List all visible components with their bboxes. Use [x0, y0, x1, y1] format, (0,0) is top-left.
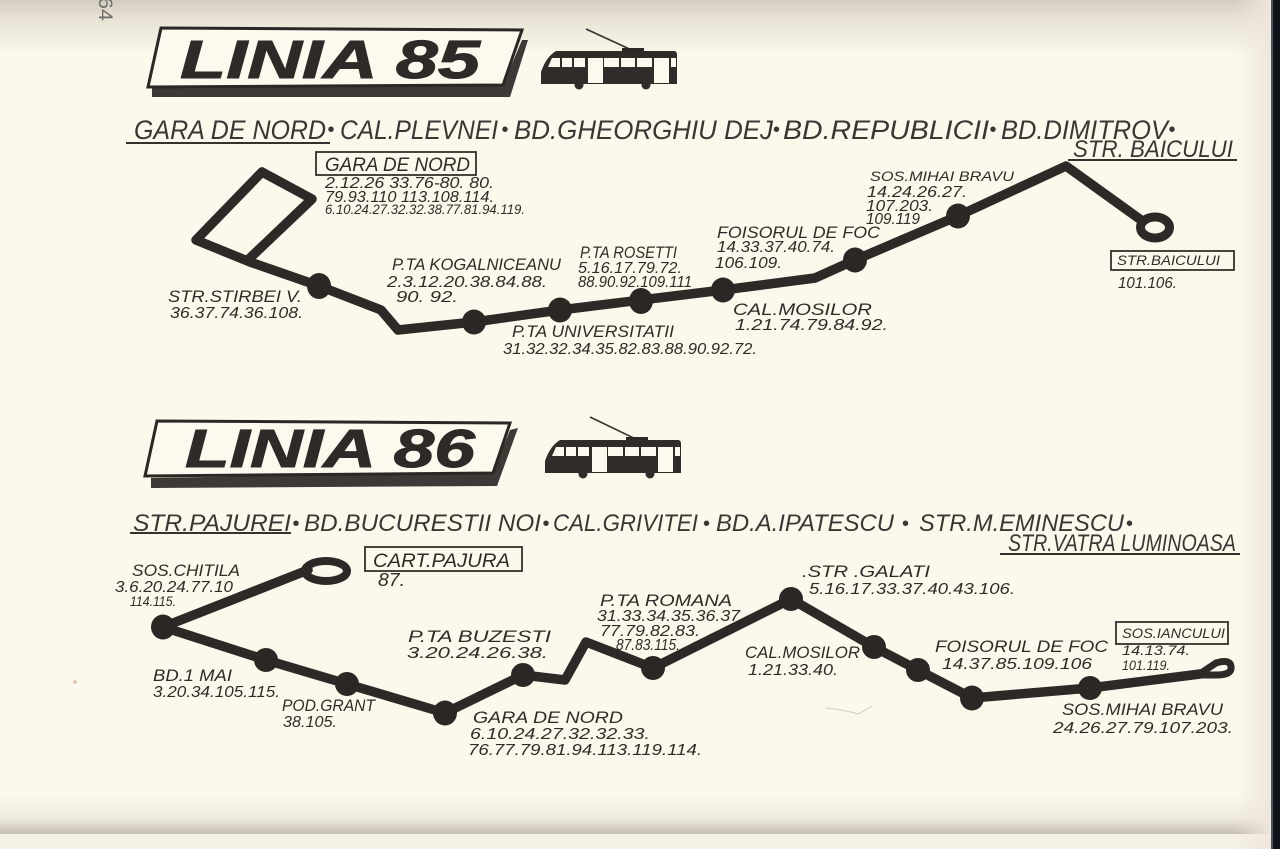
- stop: Foisorul de Foc: [715, 223, 881, 272]
- stop: Sos. Mihai Bravu: SOS.MIHAI BRAVU: [870, 169, 1014, 184]
- stop: Foisorul de Foc: [935, 637, 1109, 673]
- stop: P-ta Romana: [597, 591, 745, 654]
- stop: Bd. 1 Mai: 3.20.34.105.115.: [153, 684, 280, 701]
- stop: Str. Baicului: STR.BAICULUI: [1117, 253, 1220, 268]
- route heading line 86: [130, 510, 1240, 557]
- stop: Pod. Grant: [282, 696, 376, 731]
- stop: P-ta Rosetti: [578, 243, 692, 291]
- stop: Sos. Mihai Bravu: 24.26.27.79.107.203.: [1052, 720, 1233, 737]
- stop: P-ta Kogalniceanu: P.TA KOGALNICEANU: [392, 255, 562, 274]
- stop: Foisorul de Foc: FOISORUL DE FOC: [935, 637, 1109, 656]
- stop: Bd. 1 Mai: BD.1 MAI: [153, 666, 232, 685]
- stop: Sos. Iancului: 101.119.: [1122, 658, 1170, 673]
- route diagram line 85: [196, 166, 1170, 334]
- route heading line 86: CAL.GRIVITEI: [553, 510, 698, 537]
- stop: Sos. Mihai Bravu: 107.203.: [866, 198, 933, 215]
- route heading line 85: •: [328, 119, 335, 141]
- stop: P-ta Universitatii: P.TA UNIVERSITATII: [512, 322, 674, 341]
- route heading line 85: BD.REPUBLICII: [783, 115, 990, 145]
- title plate: Linia 86: LINIA 86: [185, 419, 476, 479]
- route heading line 85: BD.DIMITROV: [1001, 115, 1171, 145]
- stop: Gara de Nord: GARA DE NORD: [325, 155, 470, 176]
- stop: Str. Stirbei V.: STR.STIRBEI V.: [168, 287, 302, 306]
- route heading line 86: •: [1126, 513, 1133, 535]
- route heading line 86: BD.A.IPATESCU: [716, 510, 895, 537]
- route heading line 85: CAL.PLEVNEI: [340, 115, 498, 145]
- route heading line 86: •: [703, 513, 710, 535]
- route heading line 85: GARA DE NORD: [134, 115, 326, 145]
- route heading line 86: •: [542, 513, 550, 535]
- route heading line 86: STR.M.EMINESCU: [919, 510, 1125, 537]
- stop: Sos. Mihai Bravu: [1052, 700, 1233, 737]
- stop: Sos. Iancului: SOS.IANCULUI: [1122, 626, 1225, 641]
- stop: P-ta Rosetti: P.TA ROSETTI: [580, 243, 677, 262]
- stop: Foisorul de Foc: 106.109.: [715, 255, 782, 272]
- stop: Sos. Mihai Bravu: [866, 169, 1014, 228]
- stop: Sos. Iancului: 14.13.74.: [1122, 643, 1190, 658]
- stop: Gara de Nord: GARA DE NORD: [473, 708, 623, 727]
- stop: Sos. Chitila: 114.115.: [130, 594, 176, 609]
- stop: Pod. Grant: POD.GRANT: [282, 696, 376, 715]
- stop: Gara de Nord: [468, 708, 702, 759]
- stop: Sos. Chitila: [115, 561, 240, 609]
- stop: Cart. Pajura: CART.PAJURA: [373, 551, 510, 572]
- stop: Foisorul de Foc: FOISORUL DE FOC: [717, 223, 881, 242]
- stop: P-ta Rosetti: 88.90.92.109.111: [578, 274, 692, 291]
- stop: Gara de Nord: 2.12.26 33.76-80. 80.: [324, 175, 494, 192]
- stop: P-ta Romana: 31.33.34.35.36.37.: [597, 608, 745, 625]
- stop: Foisorul de Foc: 14.37.85.109.106: [942, 656, 1092, 673]
- icon: trolleybus line 86: [545, 417, 681, 478]
- stop: Cart. Pajura: 87.: [378, 570, 405, 590]
- route heading line 86: STR.VATRA LUMINOASA: [1008, 530, 1236, 557]
- stop: Gara de Nord: 6.10.24.27.32.32.33.: [470, 726, 650, 743]
- stop: Sos. Chitila: SOS.CHITILA: [132, 561, 240, 580]
- stop: Gara de Nord: 76.77.79.81.94.113.119.114.: [468, 742, 702, 759]
- stop: Sos. Chitila: 3.6.20.24.77.10: [115, 579, 233, 596]
- stop: P-ta Kogalniceanu: [386, 255, 562, 306]
- stop: Str. Galati: 5.16.17.33.37.40.43.106.: [809, 581, 1015, 598]
- stop: P-ta Romana: 87.83.115.: [616, 637, 680, 654]
- stop: Cal. Mosilor: [733, 300, 888, 334]
- stop: P-ta Universitatii: [503, 322, 757, 358]
- stop: Str. Galati: [802, 562, 1015, 598]
- route heading line 86: •: [902, 513, 909, 535]
- stop: Gara de Nord: 6.10.24.27.32.32.38.77.81.94.119.: [325, 202, 525, 217]
- route diagram line 86: [151, 561, 1231, 726]
- route heading line 86: •: [292, 513, 300, 535]
- stop: Str. Baicului: [1111, 251, 1234, 292]
- stop: Str. Baicului: 101.106.: [1118, 275, 1177, 292]
- stop: Str. Stirbei V.: [168, 287, 303, 322]
- stop: P-ta Universitatii: 31.32.32.34.35.82.83.88.90.92.72.: [503, 341, 757, 358]
- stop: Str. Stirbei V.: 36.37.74.36.108.: [170, 305, 303, 322]
- route heading line 85: •: [1168, 119, 1176, 141]
- stop: P-ta Buzesti: [407, 627, 551, 662]
- title plate: Linia 85: [148, 28, 528, 97]
- route heading line 85: •: [773, 119, 780, 141]
- stop: Cal. Mosilor: [745, 643, 860, 679]
- stop: P-ta Buzesti: 3.20.24.26.38.: [407, 645, 548, 662]
- stop: P-ta Kogalniceanu: 90. 92.: [396, 289, 458, 306]
- route heading line 85: BD.GHEORGHIU DEJ: [514, 115, 773, 145]
- stop: P-ta Buzesti: P.TA BUZESTI: [408, 627, 551, 646]
- stop: Foisorul de Foc: 14.33.37.40.74.: [717, 239, 835, 256]
- stop: Sos. Mihai Bravu: SOS.MIHAI BRAVU: [1062, 700, 1224, 719]
- title plate: Linia 85: LINIA 85: [180, 30, 481, 90]
- stop: P-ta Romana: 77.79.82.83.: [600, 623, 700, 640]
- route heading line 85: •: [502, 119, 509, 141]
- route heading line 85: •: [990, 119, 997, 141]
- stop: Cal. Mosilor: CAL.MOSILOR: [745, 643, 860, 662]
- stop: P-ta Rosetti: 5.16.17.79.72.: [578, 260, 682, 277]
- stop: Gara de Nord: [316, 152, 525, 217]
- stop: Cart. Pajura: [365, 547, 522, 590]
- stop: Sos. Mihai Bravu: 109.119: [866, 211, 920, 228]
- stop: Cal. Mosilor: 1.21.74.79.84.92.: [735, 317, 888, 334]
- panel: line 86: [115, 417, 1240, 759]
- stop: Gara de Nord: 79.93.110 113.108.114.: [325, 189, 494, 206]
- stop: Bd. 1 Mai: [153, 666, 280, 701]
- route heading line 85: STR. BAICULUI: [1073, 136, 1233, 163]
- stop: Sos. Iancului: [1116, 622, 1228, 673]
- stop: P-ta Romana: P.TA ROMANA: [600, 591, 732, 610]
- route heading line 86: STR.PAJUREI: [133, 510, 291, 537]
- stop: Cal. Mosilor: CAL.MOSILOR: [733, 300, 872, 319]
- stop: Str. Galati: .STR .GALATI: [802, 562, 930, 581]
- route heading line 86: BD.BUCURESTII NOI: [304, 510, 541, 537]
- panel: line 85: [126, 28, 1237, 358]
- stop: Sos. Mihai Bravu: 14.24.26.27.: [867, 184, 967, 201]
- stop: Pod. Grant: 38.105.: [283, 714, 337, 731]
- stop: P-ta Kogalniceanu: 2.3.12.20.38.84.88.: [386, 274, 547, 291]
- stop: Cal. Mosilor: 1.21.33.40.: [748, 662, 838, 679]
- title plate: Linia 86: [145, 419, 518, 488]
- icon: trolleybus line 85: [541, 29, 677, 90]
- route heading line 85: [126, 115, 1237, 163]
